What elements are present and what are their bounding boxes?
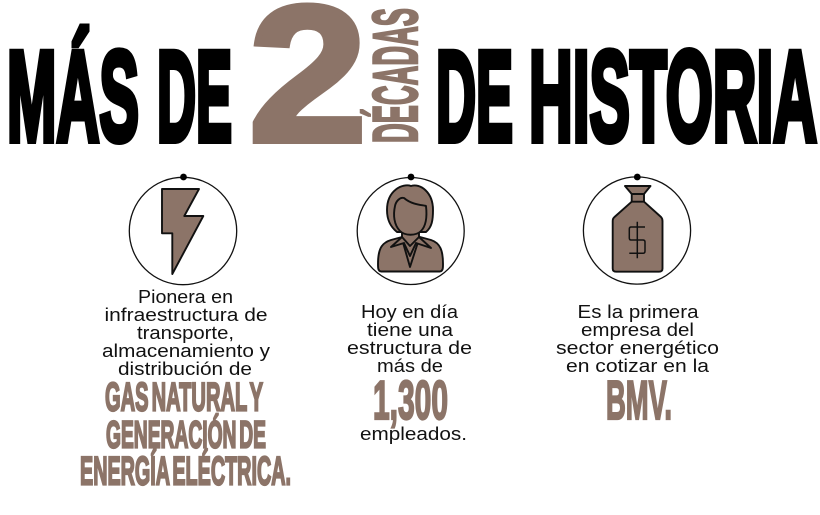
panel: stock exchange: BMV.: [606, 369, 672, 431]
title: DE: [157, 26, 232, 168]
text: stock exchange description: [556, 301, 719, 376]
text: pioneer description: Pionera en: [138, 286, 233, 307]
text: stock exchange description: Es la primera: [578, 301, 699, 322]
text: stock exchange description: en cotizar en la: [566, 355, 710, 376]
text: employees description: [347, 301, 472, 376]
text: ENERGÍA ELÉCTRICA.: [80, 448, 291, 494]
text: pioneer description: [102, 286, 271, 379]
text: pioneer description: almacenamiento y: [102, 340, 271, 361]
icon: lightning bolt: [129, 174, 237, 285]
title: [7, 0, 817, 183]
highlight: gas natural y generación de energía eléctrica: GAS NATURAL Y: [105, 376, 263, 420]
icon: person: [357, 174, 464, 284]
text: employees description: Hoy en día: [361, 301, 459, 322]
text: employees description: tiene una: [367, 319, 454, 340]
panel: stock exchange: [556, 174, 719, 431]
text: employees description: estructura de: [347, 337, 472, 358]
icon: money bag: [583, 174, 691, 284]
highlight: gas natural y generación de energía eléctrica: GENERACIÓN DE: [106, 412, 266, 456]
text: stock exchange description: empresa del: [581, 319, 694, 340]
text: pioneer description: transporte,: [137, 322, 234, 343]
title: DE: [436, 26, 513, 168]
highlight: gas natural y generación de energía eléctrica: [80, 376, 291, 494]
text: employees description: más de: [377, 355, 443, 376]
text: empleados: empleados.: [360, 423, 467, 444]
panel: energy: [80, 174, 291, 494]
highlight: 1,300: 1,300: [373, 369, 448, 431]
panel: employees: [347, 174, 472, 444]
text: stock exchange description: sector energético: [556, 337, 719, 358]
text: pioneer description: infraestructura de: [104, 304, 268, 325]
text: pioneer description: distribución de: [118, 358, 252, 379]
title: MÁS: [7, 26, 139, 168]
